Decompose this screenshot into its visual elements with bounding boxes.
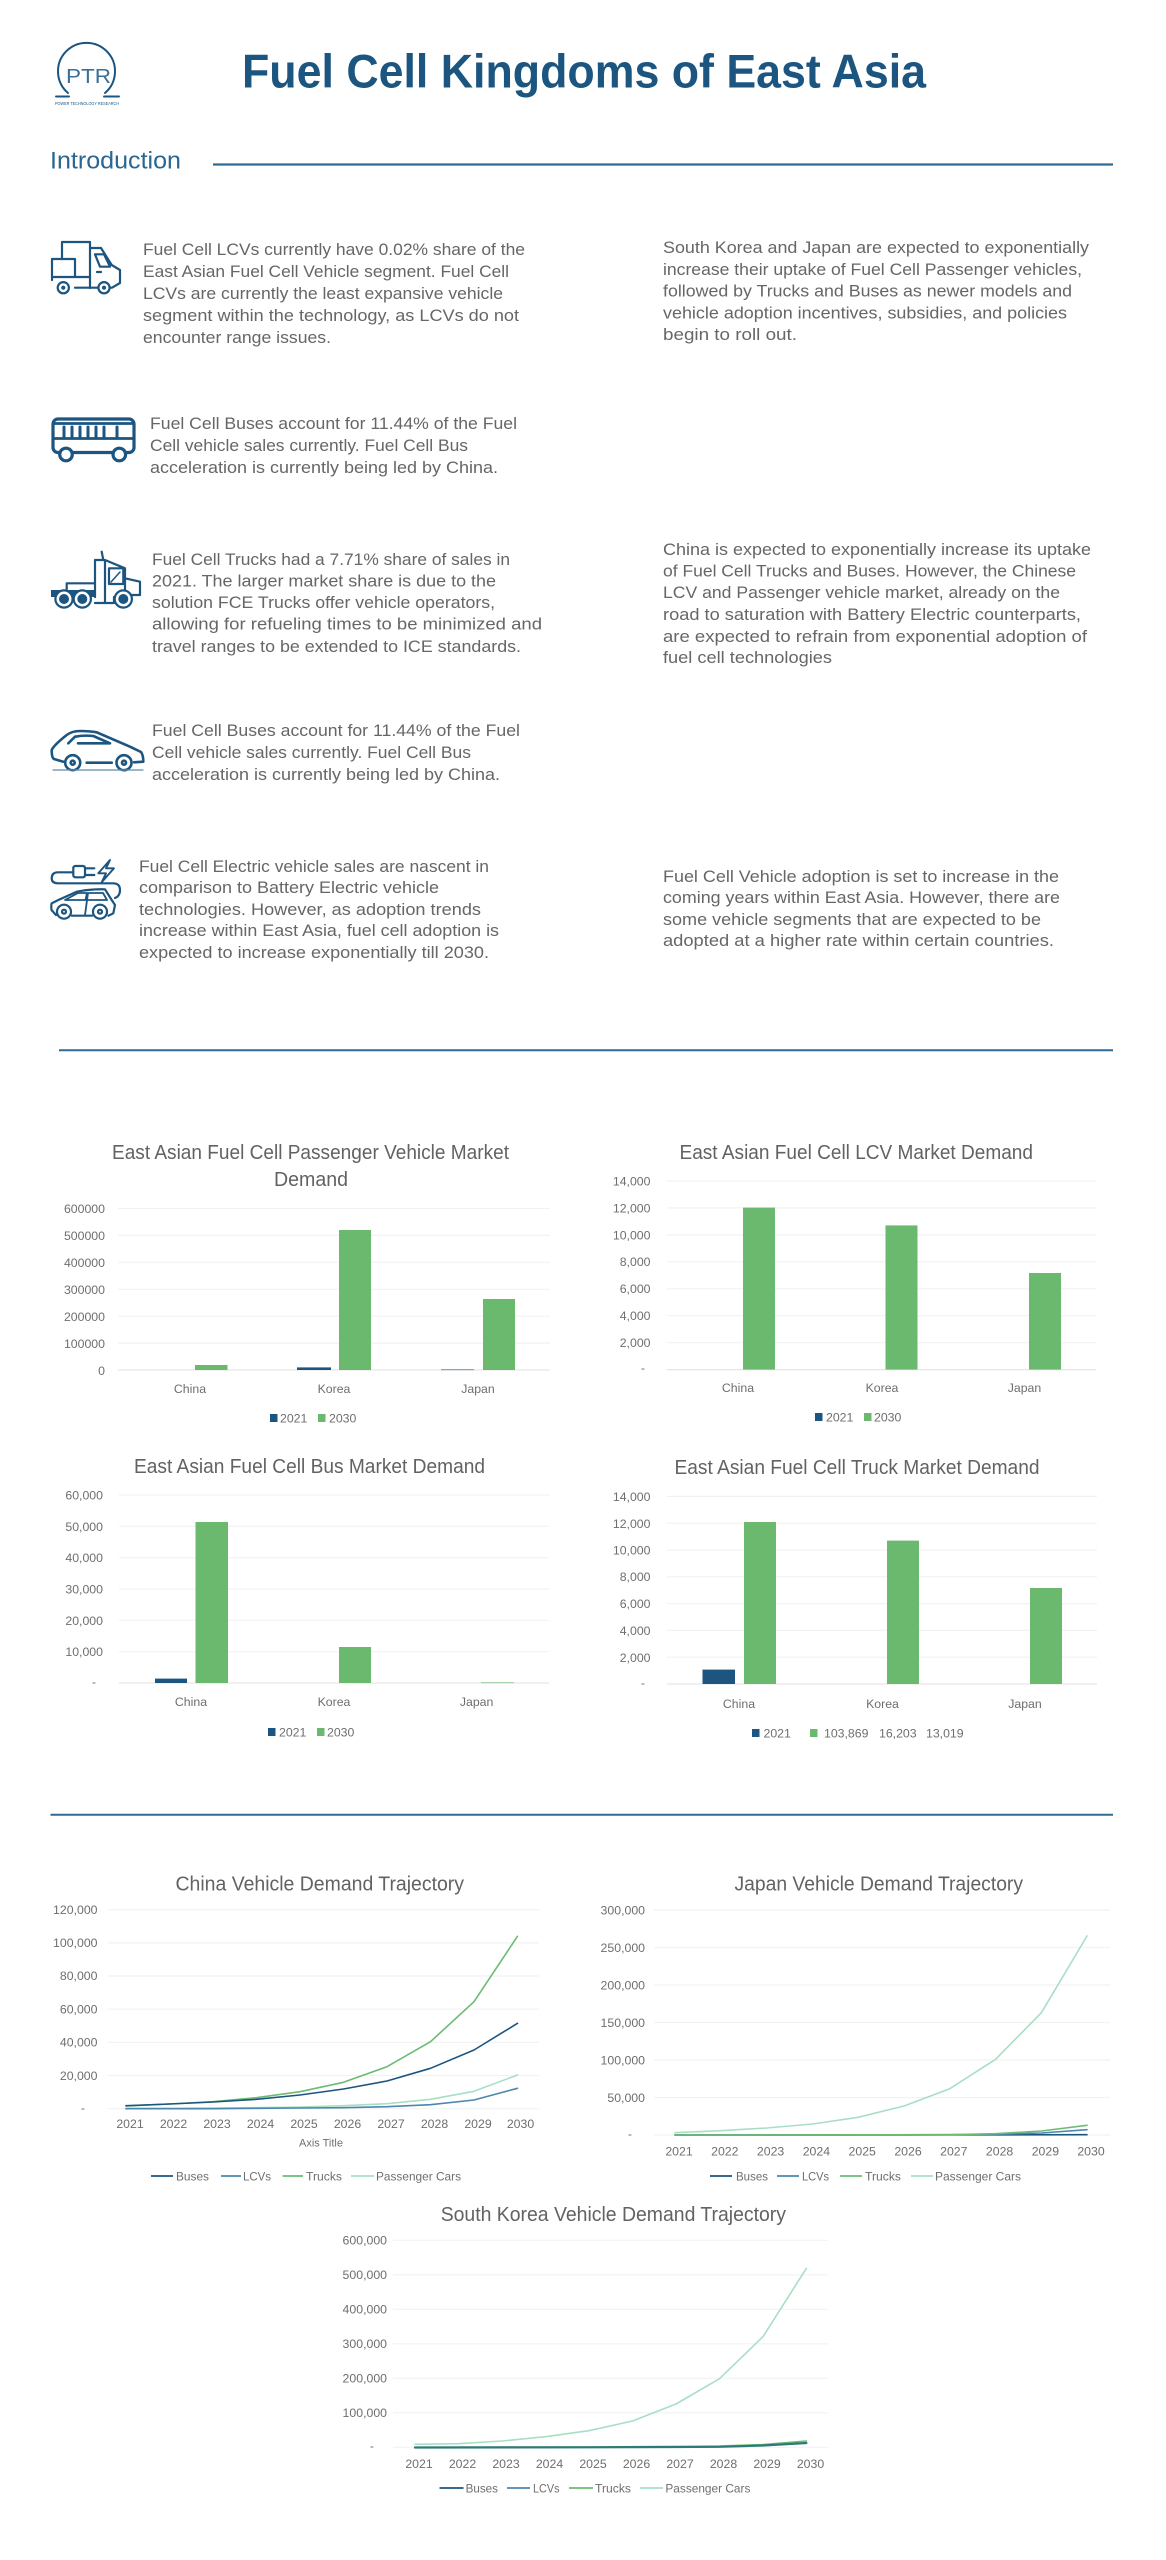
axis labels [343,2234,824,2471]
bar chart: bus demand [65,1456,549,1740]
axis labels: - [628,2127,632,2141]
axis labels: 2023 [757,2145,784,2159]
icon: passenger car [52,731,143,770]
bar chart: passenger vehicle demand [64,1142,550,1426]
text: truck share: allowing for refueling times to be minimized and [152,614,542,634]
axis labels: 120,000 [53,1903,98,1917]
text: China outlook [663,540,1091,667]
data lines [126,1936,518,2109]
axis labels: 2025 [290,2117,318,2131]
axis labels: 400000 [64,1256,105,1270]
axis labels: China [175,1695,207,1709]
axis labels: 300,000 [601,1904,645,1918]
text: South Korea and Japan outlook: South Korea and Japan are expected to exponentially [663,238,1090,257]
text: China outlook: China is expected to exponentially increase its uptake [663,540,1091,559]
chart title: South Korea Vehicle Demand Trajectory [441,2204,786,2226]
legend: Buses [736,2170,768,2184]
bars [155,1522,514,1683]
text: South Korea and Japan outlook: followed by Trucks and Buses as newer models and [663,282,1072,300]
axis labels: 50,000 [607,2091,645,2105]
legend: 16,203 [879,1726,917,1740]
chart title: Japan Vehicle Demand Trajectory [734,1874,1023,1896]
text: LCV share: LCVs are currently the least expansive vehicle [143,284,503,303]
axis labels: - [81,2101,85,2115]
axis labels: 60,000 [65,1488,103,1502]
legend: Trucks [865,2170,901,2184]
text: electric vehicle comparison: technologies. However, as adoption trends [139,900,481,919]
bars [743,1208,1061,1370]
axis labels: 50,000 [65,1520,103,1534]
axis labels: 4,000 [620,1624,651,1638]
icon: delivery truck [52,242,120,293]
text: LCV share [143,240,525,347]
axis labels: 2030 [507,2117,534,2131]
axis labels: 200,000 [343,2372,387,2386]
text: adoption outlook: coming years within East Asia. However, there are [663,888,1060,907]
text: LCV share: encounter range issues. [143,328,331,347]
axis labels: 2023 [492,2457,520,2471]
axis labels: 2024 [536,2457,563,2471]
legend: Trucks [595,2482,631,2496]
logo: PTR [66,66,111,88]
axis labels: 30,000 [65,1582,103,1596]
axis labels: 2027 [666,2457,694,2471]
line chart: China trajectory [53,1874,539,2184]
legend: Passenger Cars [376,2170,461,2184]
line chart: Japan trajectory [601,1874,1110,2184]
axis labels: 100,000 [343,2406,387,2420]
axis labels: 100,000 [601,2054,645,2068]
text: China outlook: fuel cell technologies [663,648,832,667]
axis labels: 2027 [377,2117,405,2131]
axis labels: 4,000 [620,1309,651,1323]
text: bus share repeated: Fuel Cell Buses account for 11.44% of the Fuel [152,721,520,740]
axis labels: 10,000 [65,1645,103,1659]
text: South Korea and Japan outlook: vehicle adoption incentives, subsidies, and policies [663,304,1067,322]
axis labels: 200000 [64,1310,105,1324]
axis labels: 2,000 [620,1651,651,1665]
axis labels: 8,000 [620,1570,651,1584]
axis labels: 2026 [894,2145,922,2159]
text: LCV share: segment within the technology, as LCVs do not [143,306,519,325]
text: electric vehicle comparison: comparison to Battery Electric vehicle [139,878,439,897]
text: bus share repeated: acceleration is currently being led by China. [152,765,500,784]
legend [268,1726,355,1740]
axis labels [613,1174,1041,1395]
text: China outlook: road to saturation with Battery Electric counterparts, [663,605,1081,624]
axis labels: 2028 [421,2117,448,2131]
legend: LCVs [802,2170,829,2184]
axis labels: Japan [460,1695,494,1709]
axis labels: 2022 [711,2145,739,2159]
legend: Passenger Cars [935,2170,1021,2184]
axis labels: China [174,1382,206,1396]
chart title [112,1142,509,1191]
chart title: Demand [274,1169,348,1191]
axis labels: 2027 [940,2145,968,2159]
axis labels: 14,000 [613,1490,651,1504]
text: truck share: travel ranges to be extended to ICE standards. [152,637,521,656]
text: electric vehicle comparison: expected to increase exponentially till 2030. [139,943,489,962]
icon: bus [53,419,134,461]
legend: 2021 [280,1412,308,1426]
axis labels: 2023 [203,2117,231,2131]
axis labels: 20,000 [60,2069,98,2083]
axis labels: 500,000 [343,2268,387,2282]
text: truck share: 2021. The larger market share is due to the [152,572,496,590]
text: bus share: acceleration is currently being led by China. [150,458,498,477]
legend: 2021 [279,1726,307,1740]
text: South Korea and Japan outlook [663,238,1090,344]
legend [752,1726,964,1740]
text: South Korea and Japan outlook: begin to roll out. [663,325,797,344]
axis labels: 2024 [803,2145,830,2159]
axis labels: 20,000 [65,1614,103,1628]
line chart: South Korea trajectory [343,2204,828,2496]
axis labels: 2026 [334,2117,361,2131]
chart title: East Asian Fuel Cell LCV Market Demand [680,1142,1033,1164]
axis labels: 2028 [710,2457,737,2471]
axis labels: 2029 [753,2457,781,2471]
axis labels: 2022 [160,2117,187,2131]
axis labels [64,1202,495,1396]
legend [151,2170,461,2184]
bars [702,1522,1062,1684]
chart title: East Asian Fuel Cell Bus Market Demand [134,1456,485,1478]
legend: 2030 [329,1412,357,1426]
axis labels: 250,000 [601,1941,645,1955]
legend: 13,019 [926,1726,964,1740]
text: electric vehicle comparison: Fuel Cell Electric vehicle sales are nascent in [139,857,489,876]
axis labels: 40,000 [65,1551,103,1565]
heading: introduction: Introduction [50,148,181,174]
icon: heavy truck [51,552,140,608]
axis labels: Korea [866,1381,899,1395]
axis labels: Korea [318,1695,351,1709]
axis labels: 2,000 [620,1336,651,1350]
legend [440,2482,750,2496]
text: South Korea and Japan outlook: increase their uptake of Fuel Cell Passenger vehicles, [663,260,1082,279]
axis labels: China [723,1697,755,1711]
text: bus share [150,414,517,477]
text: bus share repeated [152,721,520,784]
axis labels: 2022 [449,2457,476,2471]
legend: LCVs [243,2170,271,2184]
axis labels: 12,000 [613,1202,651,1216]
axis labels: - [641,1361,645,1375]
text: adoption outlook: Fuel Cell Vehicle adoption is set to increase in the [663,867,1059,886]
text: adoption outlook: some vehicle segments that are expected to be [663,910,1041,929]
legend: 2030 [327,1726,355,1740]
axis labels: - [370,2439,374,2453]
axis labels: Japan [1008,1697,1042,1711]
axis labels: 2030 [1077,2145,1105,2159]
text: bus share repeated: Cell vehicle sales currently. Fuel Cell Bus [152,743,471,762]
axis labels: 40,000 [60,2036,98,2050]
legend: Trucks [306,2170,342,2184]
legend [815,1410,902,1424]
text: LCV share: East Asian Fuel Cell Vehicle segment. Fuel Cell [143,262,509,281]
legend: 2021 [826,1410,854,1424]
text: electric vehicle comparison [139,857,499,962]
axis labels: 0 [98,1364,105,1378]
chart title: East Asian Fuel Cell Truck Market Demand [674,1457,1040,1479]
axis labels: 2021 [665,2145,693,2159]
axis labels: 300,000 [343,2337,387,2351]
axis labels [613,1490,1042,1711]
text: China outlook: of Fuel Cell Trucks and Buses. However, the Chinese [663,562,1076,580]
legend: LCVs [533,2482,560,2496]
axis labels: 100,000 [53,1936,98,1950]
axis labels: - [92,1675,96,1689]
data lines [415,2268,806,2448]
legend: 2021 [764,1726,791,1740]
axis labels: 14,000 [613,1174,651,1188]
legend: Passenger Cars [665,2482,750,2496]
axis labels: 2021 [116,2117,144,2131]
chart title: East Asian Fuel Cell Passenger Vehicle Market [112,1142,509,1164]
title: Fuel Cell Kingdoms of East Asia [242,44,927,98]
axis labels: 2025 [579,2457,607,2471]
text: adoption outlook [663,867,1060,950]
axis labels: 2021 [405,2457,433,2471]
axis labels [53,1903,534,2131]
legend: Buses [466,2482,498,2496]
axis labels: Korea [318,1382,351,1396]
logo [55,43,119,106]
axis labels: China [722,1381,754,1395]
axis labels: 60,000 [60,2002,98,2016]
axis labels: 12,000 [613,1517,651,1531]
text: truck share: Fuel Cell Trucks had a 7.71% share of sales in [152,550,510,569]
axis labels: Japan [461,1382,495,1396]
text: China outlook: LCV and Passenger vehicle market, already on the [663,583,1060,602]
axis labels: 600000 [64,1202,105,1216]
legend: 2030 [874,1410,902,1424]
icon: electric car and plug [51,860,120,919]
text: China outlook: are expected to refrain from exponential adoption of [663,627,1087,646]
axis labels: 400,000 [343,2302,387,2316]
legend: 103,869 [824,1726,869,1740]
axis labels: 80,000 [60,1969,98,1983]
text: adoption outlook: adopted at a higher rate within certain countries. [663,931,1054,950]
chart title: China Vehicle Demand Trajectory [176,1874,464,1896]
axis labels: 100000 [64,1337,105,1351]
legend: Buses [176,2170,209,2184]
bar chart: LCV demand [613,1142,1096,1424]
text: bus share: Cell vehicle sales currently. Fuel Cell Bus [150,436,468,455]
axis labels: 6,000 [620,1282,651,1296]
bars [195,1230,515,1370]
axis labels: 300000 [64,1283,105,1297]
axis labels: 2024 [247,2117,274,2131]
axis labels: 10,000 [613,1228,651,1242]
axis labels: Japan [1008,1381,1041,1395]
axis labels: 2025 [849,2145,876,2159]
text: bus share: Fuel Cell Buses account for 11.44% of the Fuel [150,414,517,433]
axis labels: 10,000 [613,1544,651,1558]
axis title: Axis Title [299,2138,343,2150]
axis labels: Korea [866,1697,899,1711]
data lines [675,1936,1087,2135]
axis labels: 2028 [986,2145,1013,2159]
axis labels: 6,000 [620,1597,651,1611]
text: truck share [152,550,542,656]
bar chart: truck demand [613,1457,1097,1740]
text: truck share: solution FCE Trucks offer vehicle operators, [152,593,495,612]
axis labels: 600,000 [343,2234,387,2248]
axis labels [65,1488,494,1709]
text: electric vehicle comparison: increase within East Asia, fuel cell adoption is [139,921,499,940]
axis labels: 500000 [64,1229,105,1243]
legend [270,1412,357,1426]
axis labels: 200,000 [601,1978,645,1992]
axis labels: 2029 [464,2117,492,2131]
axis labels: - [641,1676,645,1690]
axis labels: 2030 [797,2457,824,2471]
axis labels [601,1904,1105,2159]
axis labels: 150,000 [601,2016,645,2030]
text: LCV share: Fuel Cell LCVs currently have 0.02% share of the [143,240,525,259]
axis labels: 8,000 [620,1255,651,1269]
logo: POWER TECHNOLOGY RESEARCH [55,101,119,106]
axis labels: 2026 [623,2457,650,2471]
axis labels: 2029 [1032,2145,1059,2159]
legend [710,2170,1021,2184]
